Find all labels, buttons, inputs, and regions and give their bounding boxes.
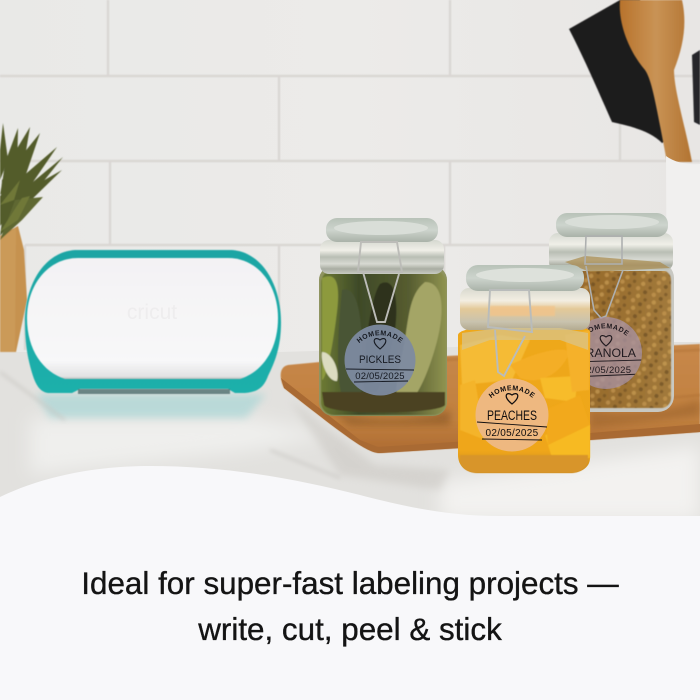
plant in wooden vase — [0, 123, 63, 352]
label: granola: 02/05/2025 — [581, 365, 631, 376]
jar: pickles — [319, 218, 447, 416]
dark handle — [692, 50, 700, 125]
white wave panel — [0, 466, 700, 700]
wooden spoon — [620, 0, 692, 162]
label: granola — [586, 317, 642, 389]
label: pickles: HOMEMADE — [356, 330, 404, 343]
caption — [81, 566, 619, 647]
label: granola: HOMEMADE — [588, 323, 630, 336]
embossed logo: cricut — [127, 301, 177, 324]
caption: write, cut, peel & stick — [198, 612, 502, 647]
label: granola: GRANOLA — [576, 346, 636, 360]
wire clasp — [358, 242, 402, 322]
wire clasp — [488, 290, 532, 376]
caption: Ideal for super-fast labeling projects — — [81, 566, 619, 601]
jar: peaches — [458, 265, 591, 474]
machine shadow — [78, 389, 230, 394]
marble counter — [0, 340, 700, 530]
cutting board — [281, 344, 700, 453]
label: peaches — [476, 378, 548, 452]
black spatula — [569, 0, 668, 143]
photo: kitchen counter scene — [0, 0, 700, 516]
label: peaches: 02/05/2025 — [485, 428, 539, 439]
label: peaches: HOMEMADE — [488, 385, 536, 398]
label: pickles — [344, 324, 416, 396]
label: pickles: PICKLES — [359, 354, 401, 366]
teal base — [25, 250, 281, 393]
utensil holder — [569, 0, 700, 342]
label: pickles: 02/05/2025 — [355, 371, 405, 382]
white lid — [27, 258, 278, 379]
jar: granola — [549, 213, 674, 412]
white cup — [666, 156, 700, 342]
tiled wall — [0, 0, 700, 370]
label: peaches: PEACHES — [487, 408, 537, 423]
cricut machine — [25, 250, 281, 394]
wire clasp — [585, 236, 623, 318]
